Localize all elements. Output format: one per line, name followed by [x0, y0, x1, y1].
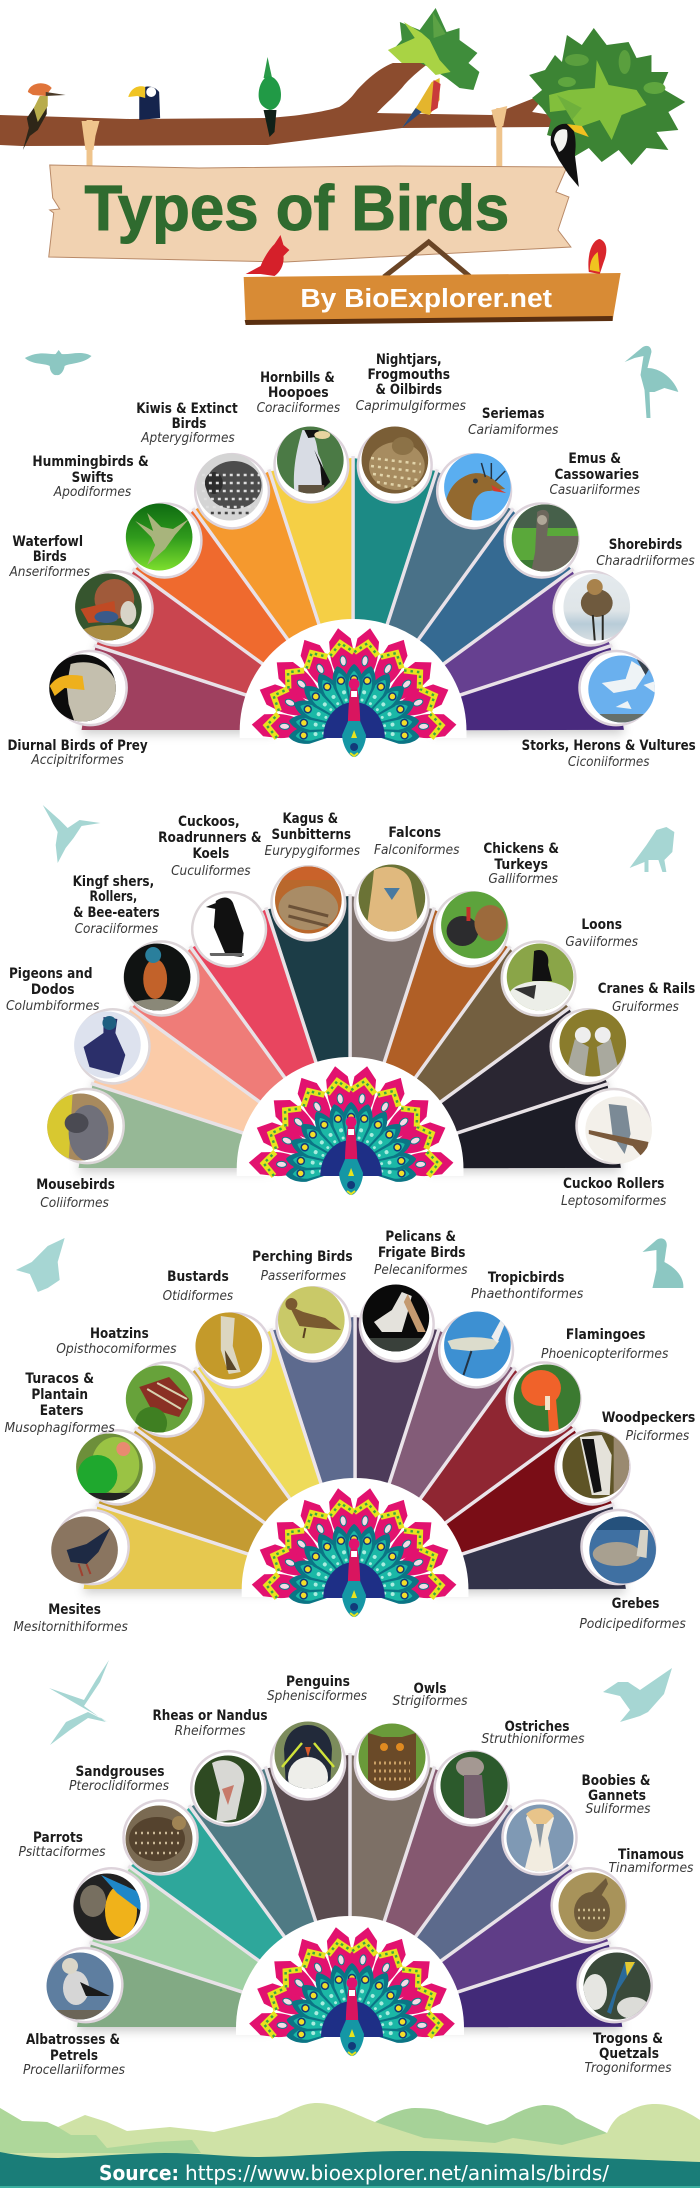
label: Cuckoos, Roadrunners & Koels: [158, 814, 262, 879]
label: Bustards: [163, 1269, 233, 1304]
label: Albatrosses & Petrels: Procellariiformes: [23, 2063, 125, 2078]
label: Chickens & Turkeys: [483, 841, 559, 887]
fan chart: group 1: [48, 423, 658, 786]
label: Chickens & Turkeys: Chickens &: [483, 841, 559, 857]
label: Mousebirds: Coliiformes: [40, 1196, 109, 1211]
fan chart: group 3: [50, 1282, 660, 1645]
centre disc: [240, 619, 466, 738]
label: Cuckoos, Roadrunners & Koels: Cuculiformes: [171, 864, 251, 879]
label: Kagus & Sunbitterns: Kagus &: [282, 811, 338, 827]
peacock: [248, 1064, 454, 1195]
photo halos: [48, 423, 658, 730]
source line: Source:: [99, 2161, 179, 2185]
label: Cranes & Rails: [598, 981, 695, 1015]
panel: group 2: [6, 805, 695, 1224]
label: Emus & Cassowaries: [550, 451, 640, 498]
label: Boobies & Gannets: Gannets: [588, 1788, 646, 1804]
label: Sandgrouses: [69, 1764, 169, 1794]
peacock: [251, 1486, 457, 1617]
label: Waterfowl Birds: Anseriformes: [9, 565, 90, 580]
label: Emus & Cassowaries: Emus &: [568, 451, 621, 467]
label: Penguins: Sphenisciformes: [267, 1689, 367, 1704]
label: Tinamous: Tinamous: [618, 1847, 684, 1863]
label: Waterfowl Birds: Waterfowl: [12, 534, 83, 550]
label: Falcons: Falcons: [388, 825, 441, 841]
label: Boobies & Gannets: [582, 1773, 651, 1817]
photo: sandgrouse: [125, 1805, 193, 1873]
label: Albatrosses & Petrels: Albatrosses &: [26, 2032, 120, 2048]
label: Kingfishers, Rollers, & Bee-eaters: Coraciiformes: [75, 922, 158, 937]
photo: penguin: [274, 1722, 342, 1788]
label: Flamingoes: Phoenicopteriformes: [541, 1347, 669, 1362]
label: Kingfishers, Rollers, & Bee-eaters: [73, 874, 160, 937]
separators: [89, 1753, 611, 1995]
label: Kagus & Sunbitterns: Sunbitterns: [272, 827, 351, 843]
label: Waterfowl Birds: [9, 534, 90, 580]
label: Loons: [565, 917, 638, 950]
label: Sandgrouses: Sandgrouses: [76, 1764, 164, 1780]
photo: owl: [358, 1723, 426, 1791]
label: Emus & Cassowaries: Cassowaries: [554, 467, 639, 483]
label: Owls: [392, 1681, 468, 1709]
label: Hummingbirds & Swifts: Swifts: [72, 470, 113, 486]
label: Tropicbirds: [471, 1270, 584, 1302]
silhouette: stork: [625, 346, 678, 418]
label: Grebes: [579, 1596, 686, 1632]
photo: emu: [511, 504, 579, 572]
separators: [91, 894, 609, 1136]
silhouette: albatross: [49, 1660, 109, 1745]
label: Owls: Owls: [414, 1681, 446, 1697]
label: Sandgrouses: Pteroclidiformes: [69, 1779, 169, 1794]
label: Kingfishers, Rollers, & Bee-eaters: Kingf shers,: [73, 874, 154, 890]
label: Tinamous: Tinamiformes: [608, 1861, 694, 1876]
label: Mesites: Mesites: [48, 1602, 101, 1618]
label: Shorebirds: Charadriiformes: [596, 554, 695, 569]
label: Nightjars, Frogmouths & Oilbirds: Frogmouths: [368, 367, 450, 383]
photo: mandarin duck: [75, 573, 142, 645]
silhouette: heron: [603, 1668, 672, 1722]
photo: trogon: [583, 1952, 651, 2020]
label: Rheas or Nandus: Rheiformes: [174, 1724, 246, 1739]
label: Boobies & Gannets: Boobies &: [582, 1773, 650, 1789]
label: Parrots: [18, 1830, 106, 1860]
label: Albatrosses & Petrels: Petrels: [50, 2048, 98, 2064]
label: Hornbills & Hoopoes: Coraciiformes: [257, 401, 340, 416]
photo: shorebird: [563, 573, 631, 641]
bird: green turaco: [259, 57, 281, 137]
photo: pigeon: [74, 1011, 141, 1079]
label: Storks, Herons & Vultures: [522, 738, 696, 770]
photo: falcon: [358, 864, 426, 932]
label: Diurnal Birds of Prey: Accipitriformes: [30, 753, 124, 768]
label: Loons: Loons: [581, 917, 622, 933]
label: Diurnal Birds of Prey: [7, 738, 148, 768]
label: Nightjars, Frogmouths & Oilbirds: Nightjars,: [376, 352, 442, 368]
photo: crane: [559, 1009, 627, 1077]
label: Hummingbirds & Swifts: Apodiformes: [53, 485, 132, 500]
panel: group 3: [4, 1229, 695, 1645]
label: Shorebirds: [596, 537, 695, 569]
label: Flamingoes: [541, 1327, 669, 1362]
label: Cuckoo Rollers: Cuckoo Rollers: [563, 1176, 664, 1192]
label: Owls: Strigiformes: [392, 1694, 468, 1709]
label: Mesites: [13, 1602, 128, 1635]
photo: hummingbird: [125, 503, 193, 571]
label: Rheas or Nandus: [152, 1708, 268, 1739]
photo: nightjar: [361, 426, 429, 494]
wedges: [77, 1742, 635, 2083]
label: Falcons: [374, 825, 460, 858]
photo: hoatzin: [126, 1366, 192, 1432]
label: Falcons: Falconiformes: [374, 843, 460, 858]
photo: gannet: [506, 1804, 574, 1872]
tree branch: [0, 63, 551, 146]
label: Turacos & Plantain Eaters: Musophagiformes: [4, 1421, 115, 1436]
label: Kingfishers, Rollers, & Bee-eaters: & Bee-eaters: [73, 905, 160, 921]
label: Loons: Gaviiformes: [565, 935, 638, 950]
photo: rhea: [194, 1755, 262, 1823]
silhouette: crow: [630, 827, 674, 872]
centre disc: [236, 1916, 464, 2035]
label: Kiwis & Extinct Birds: Birds: [172, 416, 206, 432]
source line: https://www.bioexplorer.net/animals/birds/: [185, 2161, 609, 2185]
label: Hummingbirds & Swifts: [32, 454, 149, 500]
label: Kiwis & Extinct Birds: Apterygiformes: [140, 431, 235, 446]
photo halos: [43, 1720, 657, 2027]
label: Chickens & Turkeys: Turkeys: [494, 857, 548, 873]
label: Mesites: Mesitornithiformes: [13, 1620, 128, 1635]
label: Nightjars, Frogmouths & Oilbirds: Caprimulgiformes: [356, 399, 466, 414]
label: Nightjars, Frogmouths & Oilbirds: & Oilbirds: [375, 382, 442, 398]
label: Tropicbirds: Tropicbirds: [488, 1270, 564, 1286]
header illustration: [0, 8, 685, 325]
bird: toucan on tree: [551, 124, 589, 187]
label: Boobies & Gannets: Suliformes: [586, 1802, 651, 1817]
peacock: [251, 626, 457, 757]
silhouette: flying bird: [25, 350, 92, 375]
photo: albatross: [46, 1952, 114, 2020]
bird: macaw: [588, 239, 606, 274]
subtitle: By BioExplorer.net: [300, 285, 552, 313]
label: Pigeons and Dodos: Columbiformes: [6, 999, 100, 1014]
separators: [94, 456, 612, 698]
foliage tree: [529, 28, 685, 165]
label: Mousebirds: Mousebirds: [36, 1177, 115, 1193]
label: Waterfowl Birds: Birds: [33, 549, 67, 565]
label: Parrots: Parrots: [33, 1830, 83, 1846]
label: Seriemas: Cariamiformes: [468, 423, 559, 438]
label: Flamingoes: Flamingoes: [566, 1327, 645, 1343]
label: Hornbills & Hoopoes: [257, 370, 340, 416]
fan chart: group 2: [45, 861, 655, 1224]
label: Cuckoos, Roadrunners & Koels: Roadrunners &: [158, 830, 262, 846]
label: Cuckoo Rollers: [561, 1176, 667, 1209]
label: Storks, Herons & Vultures: Ciconiiformes: [568, 755, 650, 770]
label: Turacos & Plantain Eaters: Eaters: [40, 1403, 84, 1419]
photo: puffin: [276, 426, 344, 494]
label: Penguins: [267, 1674, 367, 1704]
label: Pelicans & Frigate Birds: Frigate Birds: [378, 1245, 465, 1261]
photo: mesite: [51, 1516, 118, 1584]
label: Diurnal Birds of Prey: Diurnal Birds of Prey: [7, 738, 148, 754]
photo: bustard: [195, 1312, 263, 1380]
photo: loon: [506, 943, 574, 1013]
label: Seriemas: Seriemas: [482, 406, 545, 422]
photo: woodpecker: [562, 1431, 630, 1499]
label: Turacos & Plantain Eaters: [4, 1371, 115, 1436]
label: Pigeons and Dodos: Pigeons and: [9, 966, 92, 982]
label: Chickens & Turkeys: Galliformes: [488, 872, 558, 887]
label: Hornbills & Hoopoes: Hoopoes: [268, 385, 329, 401]
footer landscape: [0, 2103, 700, 2188]
label: Trogons & Quetzals: [584, 2031, 672, 2076]
label: Pelicans & Frigate Birds: Pelicans &: [385, 1229, 456, 1245]
label: Cranes & Rails: Gruiformes: [612, 1000, 679, 1015]
label: Nightjars, Frogmouths & Oilbirds: [356, 352, 466, 414]
label: Bustards: Otidiformes: [163, 1289, 233, 1304]
photo halos: [50, 1282, 660, 1589]
label: Hoatzins: Opisthocomiformes: [56, 1342, 177, 1357]
photo: macaw: [73, 1873, 141, 1941]
label: Emus & Cassowaries: Casuariiformes: [550, 483, 640, 498]
label: Pigeons and Dodos: Dodos: [31, 982, 75, 998]
label: Shorebirds: Shorebirds: [609, 537, 682, 553]
label: Grebes: Grebes: [612, 1596, 659, 1612]
label: Pelicans & Frigate Birds: [374, 1229, 468, 1278]
label: Rheas or Nandus: Rheas or Nandus: [152, 1708, 268, 1724]
label: Pigeons and Dodos: [6, 966, 100, 1014]
photo: perching bird: [277, 1286, 345, 1354]
label: Seriemas: [468, 406, 559, 438]
photo: cuckoo roller: [585, 1096, 652, 1164]
label: Trogons & Quetzals: Quetzals: [599, 2046, 659, 2062]
label: Ostriches: [482, 1719, 585, 1747]
label: Pelicans & Frigate Birds: Pelecaniformes: [374, 1263, 468, 1278]
hanging sign: [49, 165, 571, 262]
photo: seriema: [444, 453, 511, 521]
rope right: [487, 106, 509, 176]
label: Hornbills & Hoopoes: Hornbills &: [260, 370, 335, 386]
silhouette: pelican: [643, 1238, 683, 1288]
label: Cuckoos, Roadrunners & Koels: Koels: [192, 846, 229, 862]
panel: group 1: [7, 346, 696, 786]
label: Cuckoos, Roadrunners & Koels: Cuckoos,: [178, 814, 240, 830]
photo: stork flock: [588, 655, 655, 723]
label: Perching Birds: Perching Birds: [252, 1249, 353, 1265]
label: Trogons & Quetzals: Trogons &: [593, 2031, 663, 2047]
label: Trogons & Quetzals: Trogoniformes: [584, 2061, 672, 2076]
label: Kiwis & Extinct Birds: Kiwis & Extinct: [136, 401, 238, 417]
wedges: [82, 445, 636, 786]
label: Cuckoo Rollers: Leptosomiformes: [561, 1194, 667, 1209]
fan chart: group 4: [43, 1720, 657, 2083]
photo: kingfisher: [123, 943, 191, 1015]
foliage upper: [388, 8, 479, 90]
photo: kagu: [275, 866, 342, 934]
peacock: [249, 1925, 455, 2056]
label: Woodpeckers: [602, 1410, 695, 1444]
photo: mousebird: [47, 1093, 114, 1161]
photo: tropicbird: [444, 1311, 511, 1379]
silhouette: seabird: [16, 1238, 65, 1292]
separators: [96, 1315, 614, 1557]
photo: turaco: [76, 1433, 143, 1501]
photo: kiwi: [196, 453, 264, 521]
label: Tinamous: [608, 1847, 694, 1876]
label: Mousebirds: [36, 1177, 115, 1211]
silhouette: hummingbird: [43, 805, 100, 863]
photo: tinamou: [558, 1872, 626, 1940]
label: Tropicbirds: Phaethontiformes: [471, 1287, 584, 1302]
photo: grebe: [589, 1516, 656, 1584]
label: Perching Birds: [252, 1249, 353, 1284]
label: Ostriches: Struthioniformes: [482, 1732, 585, 1747]
wedges: [84, 1304, 638, 1645]
photo: eagle: [49, 654, 116, 722]
bird: hoopoe: [23, 83, 66, 150]
label: Albatrosses & Petrels: [23, 2032, 125, 2078]
label: Ostriches: Ostriches: [504, 1719, 570, 1735]
photo: ostrich: [440, 1751, 508, 1819]
label: Bustards: Bustards: [167, 1269, 229, 1285]
label: Woodpeckers: Piciformes: [626, 1429, 689, 1444]
bird: cardinal: [246, 235, 289, 276]
bird: parrot on branch: [402, 78, 441, 128]
title: Types of Birds: [85, 172, 509, 244]
wooden board: [244, 273, 621, 325]
centre disc: [242, 1478, 468, 1597]
photo halos: [45, 861, 655, 1168]
label: Hoatzins: Hoatzins: [90, 1326, 149, 1342]
label: Kagus & Sunbitterns: [265, 811, 360, 859]
label: Turacos & Plantain Eaters: Plantain: [31, 1387, 88, 1403]
label: Hummingbirds & Swifts: Hummingbirds &: [32, 454, 149, 470]
photo: koel: [199, 894, 244, 957]
wedges: [79, 883, 633, 1224]
rope left: [80, 120, 99, 176]
label: Perching Birds: Passeriformes: [261, 1269, 346, 1284]
hanger: [384, 242, 470, 277]
bird: toucan: [128, 86, 160, 120]
label: Kingfishers, Rollers, & Bee-eaters: Rollers,: [90, 889, 137, 905]
label: Hoatzins: [56, 1326, 177, 1357]
panel: group 4: [18, 1660, 694, 2083]
photo: flamingo: [513, 1364, 581, 1432]
label: Kagus & Sunbitterns: Eurypygiformes: [265, 844, 360, 859]
label: Parrots: Psittaciformes: [18, 1845, 106, 1860]
label: Penguins: Penguins: [286, 1674, 350, 1690]
centre disc: [237, 1057, 463, 1176]
label: Turacos & Plantain Eaters: Turacos &: [25, 1371, 94, 1387]
photo: pelican: [362, 1284, 430, 1352]
label: Kiwis & Extinct Birds: [136, 401, 238, 446]
label: Grebes: Podicipediformes: [579, 1617, 686, 1632]
photo: chickens: [441, 891, 508, 959]
